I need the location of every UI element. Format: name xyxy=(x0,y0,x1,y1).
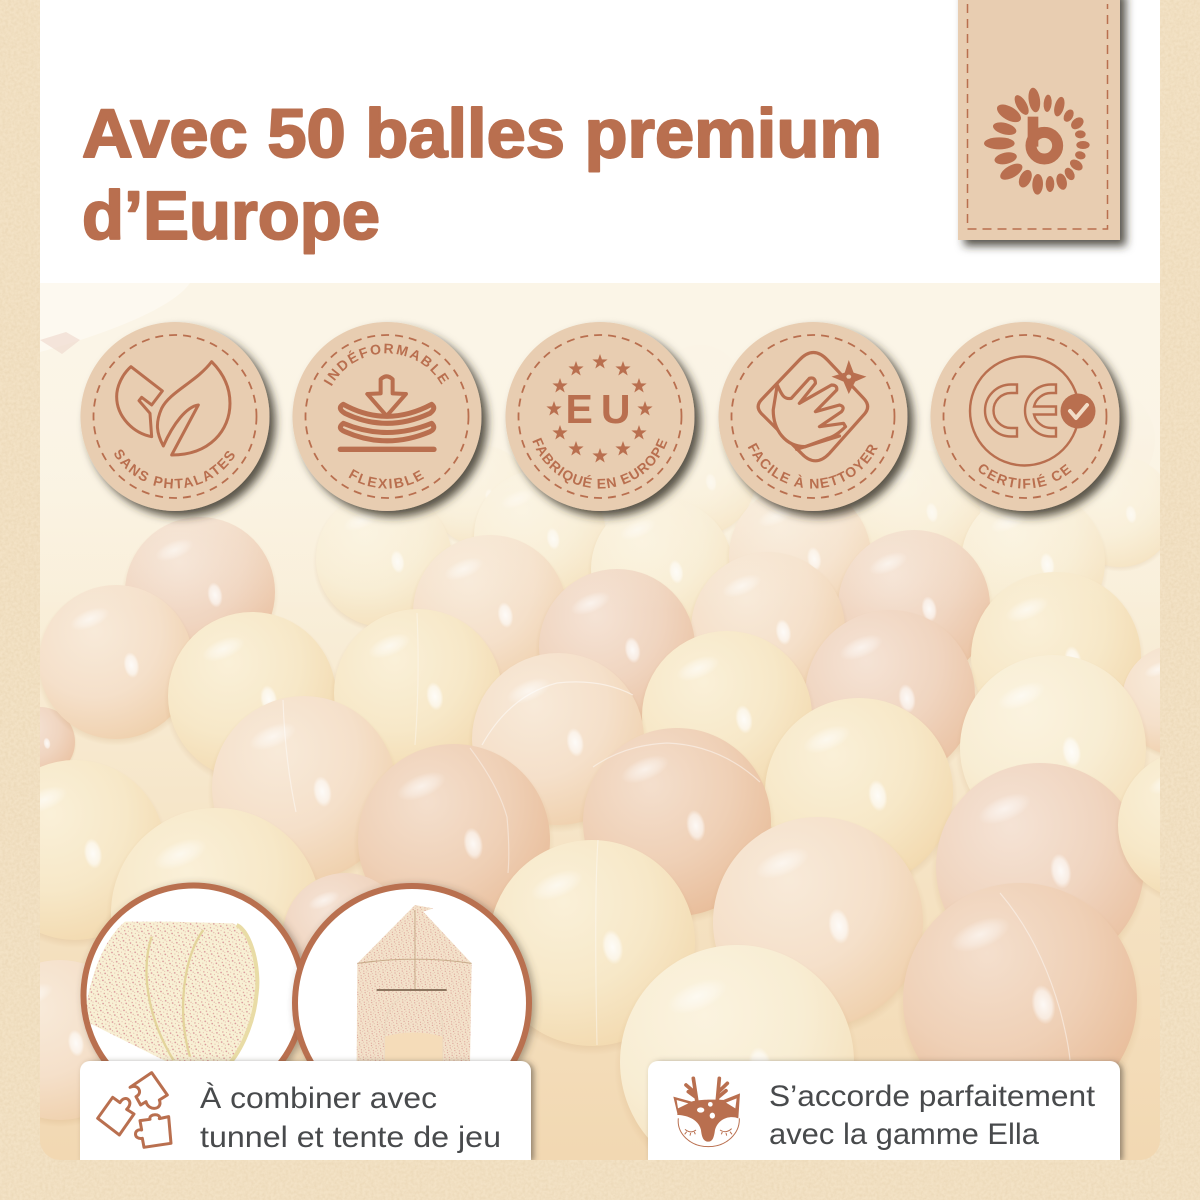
icon: leaves xyxy=(117,362,230,455)
icon: EU stars xyxy=(546,354,653,462)
title xyxy=(82,95,882,254)
icon: compressed cushion xyxy=(340,376,434,449)
photo: ball pit xyxy=(0,283,1200,1190)
badge: certifié CE xyxy=(929,320,1133,524)
labels: FLEXIBLE xyxy=(348,469,424,489)
labels: INDÉFORMABLE xyxy=(324,344,450,386)
badge: facile à nettoyer xyxy=(717,320,921,524)
logo tag xyxy=(958,0,1120,240)
icon: EU stars: EU xyxy=(566,386,638,432)
header panel xyxy=(40,0,1160,283)
title: d’Europe xyxy=(82,177,380,254)
text: combine xyxy=(200,1082,501,1154)
text: combine: tunnel et tente de jeu xyxy=(200,1121,501,1154)
tunnel photo circle xyxy=(78,880,304,1061)
icon: puzzle pieces xyxy=(98,1073,171,1147)
title: Avec 50 balles premium xyxy=(82,95,882,172)
text: Ella: avec la gamme Ella xyxy=(769,1118,1039,1151)
text: Ella xyxy=(769,1080,1096,1151)
icon: hand wiping xyxy=(758,352,868,461)
badge: indéformable flexible xyxy=(291,320,495,524)
text: Ella: S’accorde parfaitement xyxy=(769,1080,1096,1113)
text: combine: À combiner avec xyxy=(200,1082,437,1115)
label: FABRIQUÉ EN EUROPE xyxy=(532,438,668,489)
icon: sun logo with b xyxy=(984,87,1090,195)
label: CERTIFIÉ CE xyxy=(978,464,1072,489)
label: FACILE À NETTOYER xyxy=(748,442,878,489)
card: combine with tunnel and tent xyxy=(80,1061,531,1160)
card: matches Ella range xyxy=(648,1061,1120,1160)
icon: CE mark xyxy=(970,356,1096,466)
labels xyxy=(324,344,450,489)
icon: deer xyxy=(673,1078,740,1147)
tent photo circle xyxy=(290,880,540,1062)
badge: sans phtalates xyxy=(79,320,283,524)
label: SANS PHTALATES xyxy=(114,450,235,488)
badge: fabriqué en Europe xyxy=(504,320,708,524)
